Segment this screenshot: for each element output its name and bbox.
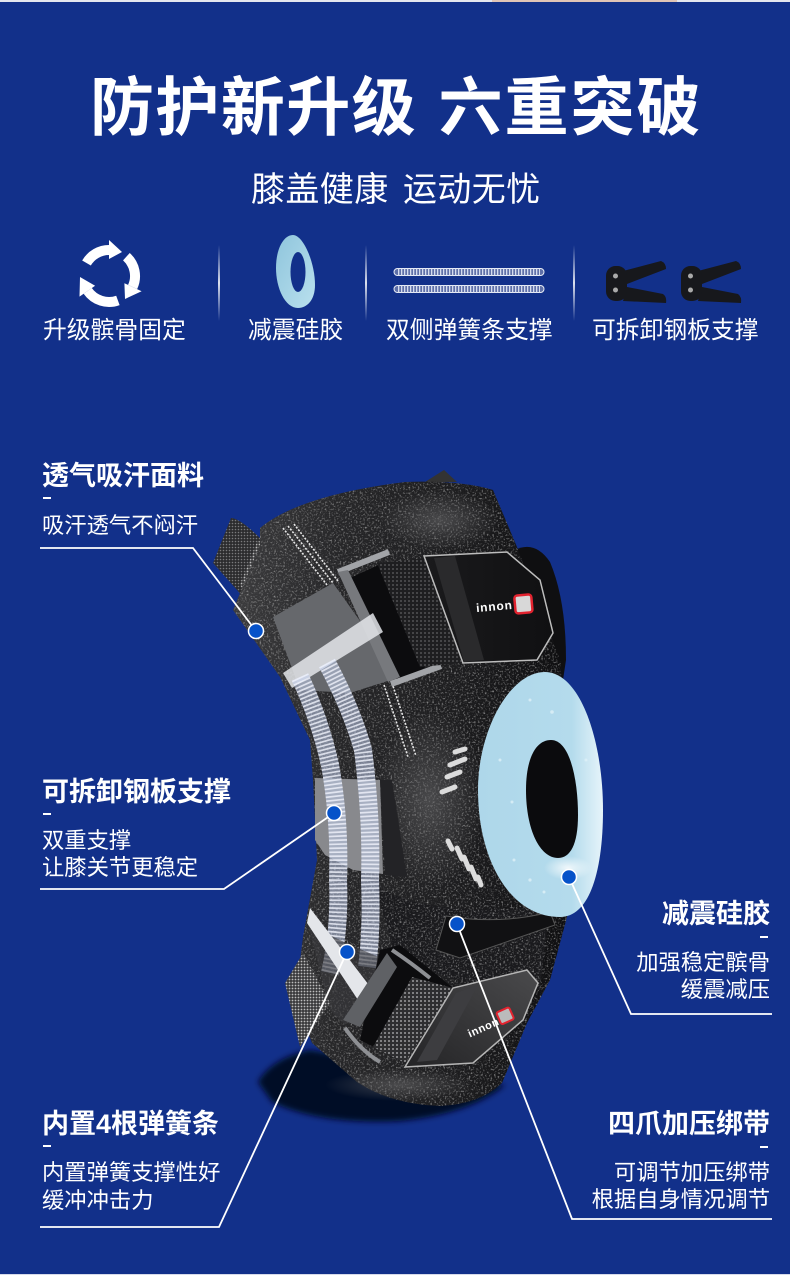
icon: springs <box>394 268 544 292</box>
leader line <box>40 813 334 889</box>
callout: breathable fabric <box>40 461 264 638</box>
upper translucent strap <box>273 583 400 693</box>
callout: shock absorbing silicone <box>562 870 772 1014</box>
gel droplets <box>498 698 588 894</box>
fabric highlights <box>325 490 500 1101</box>
floor shadow <box>258 1050 505 1122</box>
white strap lower <box>307 908 378 1007</box>
knee brace illustration <box>213 470 603 1122</box>
sleeve body <box>233 482 578 1106</box>
divider <box>573 245 575 321</box>
upper strap tab <box>424 552 553 663</box>
upper strap shadow gap <box>350 562 425 680</box>
silicone pad <box>478 672 603 917</box>
subtitle: 运动无忧 <box>403 171 541 209</box>
lower strap tab <box>405 970 538 1067</box>
mesh tab detail <box>240 540 305 622</box>
heading: 内置4根弹簧条 <box>42 1108 219 1139</box>
lower strap dark gap <box>360 945 453 1063</box>
upper strap logo <box>475 594 533 617</box>
stitching upper <box>283 524 416 757</box>
label: springs: 双侧弹簧条支撑 <box>386 317 553 344</box>
knee dashes <box>442 749 481 885</box>
lower tab inner stripe <box>417 985 478 1062</box>
springs <box>300 663 371 973</box>
lower mesh tab <box>285 953 330 1047</box>
marker <box>340 944 354 960</box>
feature row <box>43 235 759 344</box>
divider <box>365 245 367 321</box>
dash <box>43 1145 51 1147</box>
dash <box>43 813 51 815</box>
lower strap backing <box>308 925 385 1025</box>
lower grey strap <box>343 953 397 1027</box>
body: 缓冲冲击力 <box>42 1188 154 1213</box>
upper buckle <box>338 552 441 684</box>
right pad <box>510 547 566 700</box>
callout: four-claw strap <box>450 916 772 1219</box>
left pull tab <box>213 518 270 600</box>
label: patella fixation: 升级髌骨固定 <box>43 317 186 344</box>
lower strap logo: innon <box>466 1016 501 1040</box>
dash <box>760 936 768 938</box>
callout: four springs <box>40 944 354 1227</box>
title: 防护新升级 <box>90 72 417 144</box>
body: 可调节加压绑带 <box>614 1160 770 1185</box>
callout: removable steel plate <box>40 777 342 889</box>
subtitle: 膝盖健康 <box>251 171 389 209</box>
upper velcro strap <box>377 558 462 667</box>
icon: silicone ring <box>276 235 315 308</box>
body: 吸汗透气不闷汗 <box>42 513 198 538</box>
body: 缓震减压 <box>681 977 770 1002</box>
bottom edge strip <box>0 1274 790 1275</box>
lower buckle <box>345 950 430 1062</box>
upper strap logo: innon <box>475 598 513 615</box>
heading: 四爪加压绑带 <box>608 1109 770 1139</box>
dash <box>43 497 51 499</box>
leader line <box>569 877 772 1014</box>
heading: 透气吸汗面料 <box>42 461 204 491</box>
heading: 可拆卸钢板支撑 <box>42 777 231 807</box>
marker <box>450 916 464 932</box>
body: 根据自身情况调节 <box>592 1187 770 1212</box>
marker <box>326 806 342 820</box>
leader line <box>40 548 256 631</box>
cuff pressure flap <box>436 912 555 958</box>
icon: steel plates <box>606 261 741 303</box>
top edge strip <box>0 0 790 2</box>
label: silicone: 减震硅胶 <box>248 317 343 344</box>
leader line <box>457 924 772 1219</box>
top hook <box>425 470 457 482</box>
body: 双重支撑 <box>42 828 131 853</box>
tab inner stripe <box>434 556 484 662</box>
divider <box>218 245 220 321</box>
marker <box>562 870 576 884</box>
leader line <box>40 952 347 1227</box>
heading: 减震硅胶 <box>662 899 770 929</box>
icon: rotating arrows <box>80 240 142 302</box>
marker <box>248 624 264 638</box>
dash <box>760 1146 768 1148</box>
body: 加强稳定髌骨 <box>636 950 770 975</box>
steel plate <box>315 778 407 877</box>
label: steel plates: 可拆卸钢板支撑 <box>592 317 759 344</box>
lower cuff band <box>375 885 550 990</box>
lower velcro strap <box>373 977 453 1063</box>
title: 六重突破 <box>438 72 702 144</box>
body: 让膝关节更稳定 <box>42 855 198 880</box>
white strap upper <box>283 613 383 688</box>
lower strap logo <box>465 1007 515 1040</box>
body: 内置弹簧支撑性好 <box>42 1160 220 1185</box>
